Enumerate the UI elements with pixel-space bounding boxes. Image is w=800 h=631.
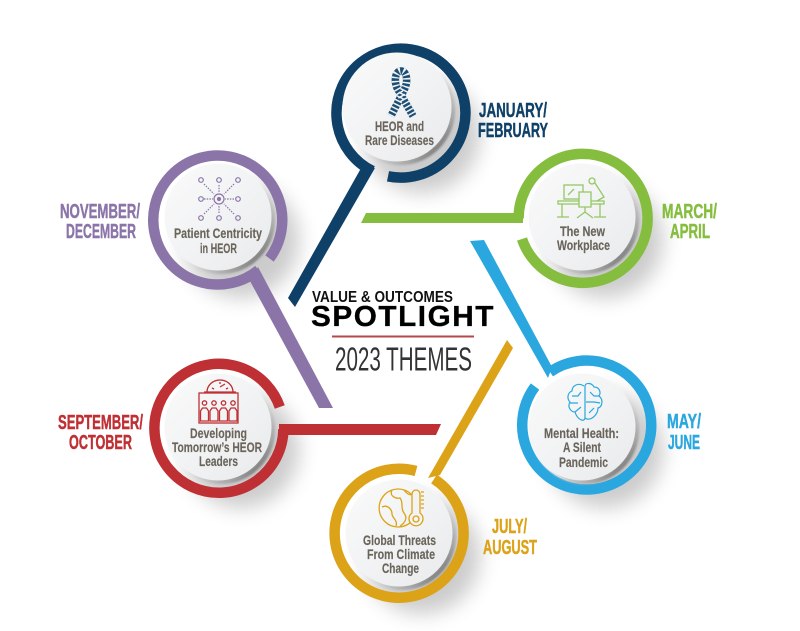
- theme label: Workplace: [557, 238, 610, 253]
- panel: May/June theme: [470, 240, 701, 508]
- panel: January/February theme: [288, 49, 548, 307]
- month label: FEBRUARY: [478, 120, 548, 142]
- month label: AUGUST: [483, 537, 537, 559]
- month label: JULY/: [492, 516, 527, 538]
- publication wordmark: SPOTLIGHT: [311, 301, 495, 333]
- month label: JANUARY/: [479, 100, 547, 122]
- theme label: [172, 426, 262, 469]
- icon: globe with thermometer: [379, 489, 424, 527]
- theme label: [544, 426, 619, 470]
- icon: leaders under a clock: [199, 380, 238, 423]
- month label: SEPTEMBER/: [58, 412, 143, 434]
- month label: MARCH/: [662, 201, 717, 223]
- month label: [478, 100, 548, 142]
- month label: MAY/: [667, 411, 701, 433]
- ring and connector: green: [361, 154, 648, 283]
- theme label: The New: [560, 224, 605, 239]
- month label: APRIL: [670, 221, 710, 243]
- panel: July/August theme: [335, 340, 537, 614]
- month label: [60, 201, 140, 243]
- icon: brain: [568, 383, 602, 420]
- rule: [332, 336, 474, 338]
- icon: zebra ribbon: [391, 71, 413, 116]
- theme label: A Silent: [563, 440, 601, 455]
- theme label: [363, 533, 436, 576]
- panel: March/April theme: [361, 154, 717, 298]
- month label: [662, 201, 717, 243]
- theme label: HEOR and: [375, 119, 424, 134]
- theme label: Change: [382, 561, 419, 576]
- panel: November/December theme: [60, 156, 333, 408]
- icon: desk workstation: [557, 178, 606, 218]
- month label: DECEMBER: [66, 221, 136, 243]
- theme label: From Climate: [367, 547, 435, 562]
- month label: OCTOBER: [69, 432, 132, 454]
- ring and connector: red: [154, 364, 441, 493]
- month label: [483, 516, 537, 559]
- theme label: in HEOR: [200, 241, 237, 256]
- ring and connector: navy: [288, 49, 465, 307]
- theme label: Patient Centricity: [174, 226, 262, 241]
- month label: NOVEMBER/: [60, 201, 140, 223]
- title: Value & Outcomes Spotlight 2023 Themes: [311, 289, 495, 378]
- theme label: Pandemic: [559, 455, 608, 470]
- theme label: [174, 226, 262, 256]
- publication name: VALUE & OUTCOMES: [312, 289, 453, 306]
- month label: [667, 411, 701, 454]
- theme label: Mental Health:: [544, 426, 619, 441]
- theme label: Leaders: [199, 454, 238, 469]
- theme label: Global Threats: [363, 533, 436, 548]
- icon: network hub: [199, 178, 240, 220]
- theme label: Tomorrow’s HEOR: [172, 440, 262, 455]
- ring and connector: blue: [470, 240, 651, 490]
- ring and connector: purple: [153, 156, 333, 408]
- theme label: [365, 119, 434, 148]
- month label: JUNE: [668, 432, 700, 454]
- theme label: Developing: [190, 426, 247, 441]
- month label: [58, 412, 143, 454]
- theme label: Rare Diseases: [365, 133, 434, 148]
- ring and connector: gold: [335, 340, 513, 598]
- theme label: [557, 224, 610, 253]
- subtitle: 2023 THEMES: [335, 340, 472, 378]
- panel: September/October theme: [58, 364, 441, 508]
